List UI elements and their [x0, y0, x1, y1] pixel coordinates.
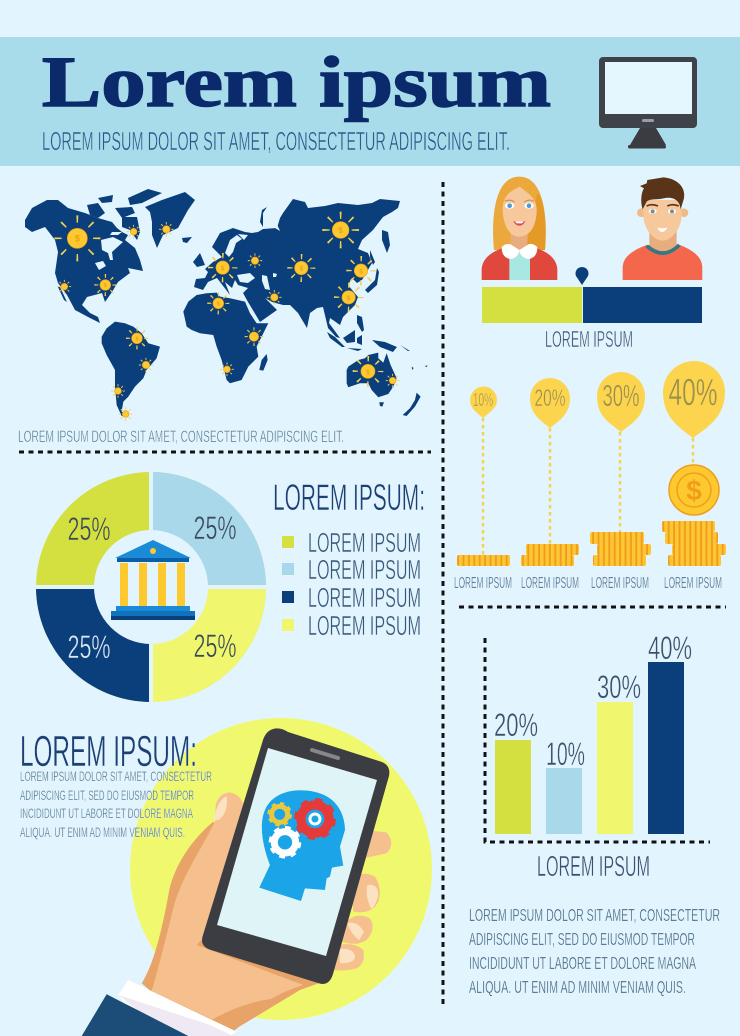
donut chart: 25% — [68, 511, 110, 547]
coin stack labels: LOREM IPSUM — [591, 575, 649, 592]
coin pin chart: 10% — [473, 390, 493, 410]
legend — [273, 477, 425, 641]
map sun markers: $ — [217, 301, 220, 307]
coin pin chart: 30% — [602, 378, 640, 413]
split pin — [576, 267, 589, 285]
donut chart: 25% — [194, 510, 236, 546]
coin stacks — [457, 521, 726, 566]
map sun markers: $ — [221, 265, 225, 272]
dividers — [19, 182, 726, 1008]
title: Lorem ipsum — [42, 42, 551, 122]
left text block: ALIQUA. UT ENIM AD MINIM VENIAM QUIS. — [20, 824, 185, 840]
woman — [482, 177, 557, 280]
split bar — [482, 267, 702, 323]
yellow circle — [130, 718, 432, 1020]
left text block — [20, 768, 212, 840]
icon: head with gears — [259, 790, 345, 901]
icon: bank — [111, 540, 195, 620]
left text block: ADIPISCING ELIT, SED DO EIUSMOD TEMPOR — [20, 787, 194, 803]
people comparison — [482, 177, 702, 280]
coin stack labels: LOREM IPSUM — [521, 575, 579, 592]
icon: dollar coin — [669, 465, 719, 515]
map sun markers: $ — [299, 266, 303, 273]
split bar label: LOREM IPSUM — [545, 326, 633, 352]
coin stack labels: LOREM IPSUM — [454, 575, 512, 592]
world map — [21, 189, 428, 420]
legend heading: LOREM IPSUM: — [273, 477, 425, 518]
left text block: INCIDIDUNT UT LABORE ET DOLORE MAGNA — [20, 805, 193, 821]
legend: LOREM IPSUM — [308, 582, 421, 613]
map sun markers: $ — [136, 336, 139, 342]
map sun markers: $ — [366, 369, 370, 376]
legend: LOREM IPSUM — [308, 554, 421, 585]
shirt cuff — [118, 980, 237, 1036]
map sun markers: $ — [359, 268, 363, 275]
map sun markers: $ — [104, 283, 107, 289]
balloon pins — [470, 361, 725, 438]
icon: monitor — [599, 57, 697, 148]
coin pin chart: 20% — [534, 385, 566, 412]
donut chart: 25% — [194, 628, 236, 664]
header band — [0, 37, 740, 166]
legend: LOREM IPSUM — [308, 610, 421, 641]
bar chart: 30% — [597, 669, 641, 705]
phone — [202, 728, 389, 984]
donut chart: 25% — [68, 629, 110, 665]
man — [623, 177, 702, 280]
suit sleeve — [82, 994, 188, 1036]
legend: LOREM IPSUM — [308, 527, 421, 558]
map sun markers — [58, 215, 398, 420]
bar chart label: LOREM IPSUM — [537, 851, 650, 883]
map sun markers: $ — [75, 234, 81, 244]
icon: dollar coin: $ — [686, 475, 702, 506]
map sun markers: $ — [347, 295, 351, 302]
map sun markers: $ — [338, 226, 343, 235]
palm and thumb — [142, 792, 323, 1032]
hand with phone — [82, 792, 391, 1036]
bar chart: 40% — [648, 630, 692, 666]
bar chart: 10% — [546, 736, 585, 772]
left text block: LOREM IPSUM DOLOR SIT AMET, CONSECTETUR — [20, 768, 212, 784]
right text block — [469, 905, 720, 997]
map caption: LOREM IPSUM DOLOR SIT AMET, CONSECTETUR ADIPISCING ELIT. — [18, 427, 344, 446]
donut chart — [34, 470, 268, 704]
coin pin chart — [454, 361, 726, 592]
bar chart: 20% — [494, 707, 538, 743]
back fingers — [333, 830, 391, 971]
coin stack labels — [454, 575, 722, 592]
left text heading: LOREM IPSUM: — [20, 727, 197, 776]
bar chart — [485, 630, 710, 842]
inland seas — [95, 218, 280, 290]
